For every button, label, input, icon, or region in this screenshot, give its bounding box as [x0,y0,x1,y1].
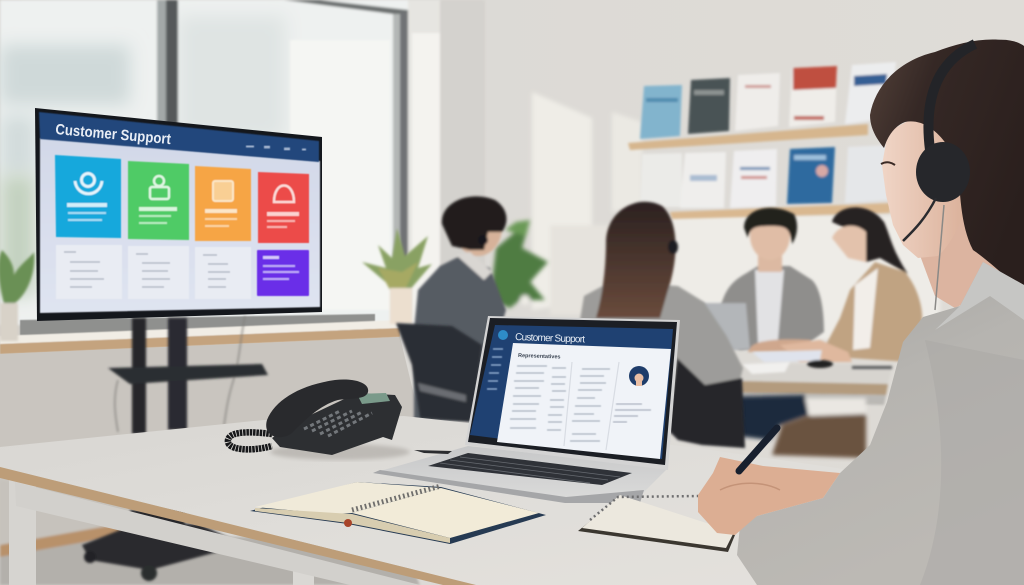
phone display [357,393,390,404]
pen [739,428,777,471]
laptop content panel [497,343,671,459]
brochure: lower row 2 [680,152,726,208]
laptop divider lines [564,362,619,450]
tv card: blue [55,155,121,238]
phone keypad [304,411,372,436]
agent hair front [870,39,1024,292]
tv header bar [39,112,319,162]
wall sunlight patches [532,92,940,340]
notebook bookmark [344,519,352,527]
laptop logo [498,330,508,340]
brochure: blue [640,85,682,139]
agent eye [881,162,895,165]
tv title: Customer Support [55,121,172,148]
brochure: red [789,66,837,127]
legs under back table [700,395,866,458]
person in foreground with headset [698,39,1024,585]
desk apron [15,482,420,585]
agent face [882,95,972,258]
lower shelf [670,203,890,219]
laptop avatar [629,366,649,386]
desk phone [228,380,402,455]
laptop screen [470,325,673,459]
laptop list [510,366,610,441]
plant: left of tv [0,250,34,341]
agent neck [918,190,1010,308]
tv card: orange [195,166,251,241]
colleague: woman in beige jacket [780,207,922,362]
laptop behind [698,303,750,352]
agent hair back [930,40,1024,292]
brochure: lower blue [787,147,835,204]
tv screen [40,138,320,313]
colleague: woman with long hair [580,202,745,448]
agent jacket collar [935,262,1024,330]
back table [685,364,893,446]
laptop sidebar [487,349,503,389]
notebook left page [255,482,441,514]
papers on back table [742,350,892,374]
laptop base [373,446,668,503]
laptop keyboard [428,453,632,485]
tv stand [82,316,268,581]
brochure: lower row 5 [845,145,890,203]
phone cord [228,432,272,449]
shadow: under phone [270,444,410,460]
notebook spiral [352,486,441,510]
notebook: open on desk [250,482,546,544]
brochure: white blue [845,62,896,124]
plant: centre windowsill [362,228,432,324]
phone handset [266,380,368,437]
laptop title: Customer Support [515,332,585,345]
tv header nav [246,146,306,150]
window sill [0,314,400,354]
tv monitor [35,108,322,321]
tv panel: lower lists [56,245,251,299]
desk leg: left [9,480,36,585]
colleague: man with headset [414,196,506,420]
window with city view [0,0,485,340]
office chair [396,323,482,422]
tv card: green [128,161,189,240]
agent jacket [737,262,1024,585]
desk surface [0,416,850,585]
notepad: spiral [578,495,735,552]
brochure: white [735,73,780,131]
desk leg: centre [293,560,314,585]
phone body [272,393,402,455]
baseboard and floor [0,480,420,585]
colleague: man at right table [716,208,824,352]
headset earcup [916,142,970,202]
brochure: lower row 3 [730,149,777,208]
laptop details text [613,404,651,422]
notebook cover [250,482,546,544]
laptop lid [465,316,680,470]
mark on desk [414,450,452,454]
brochure: dark [688,78,730,134]
agent jacket fold [920,340,1024,585]
headset cable [935,205,944,310]
headset band [928,44,975,150]
laptop subheading: Representatives [518,353,561,360]
headset mic [903,198,936,241]
tv card: purple [257,250,309,296]
desk front edge [0,467,476,585]
tv card: red [258,172,309,243]
upper shelf [628,124,868,150]
notebook right page [352,488,539,538]
shelves with brochures [628,62,896,219]
laptop [373,316,680,503]
brochure: lower row 1 [640,153,682,207]
lower wall [0,337,420,545]
agent hand [698,457,840,535]
plant: behind man [490,220,548,308]
